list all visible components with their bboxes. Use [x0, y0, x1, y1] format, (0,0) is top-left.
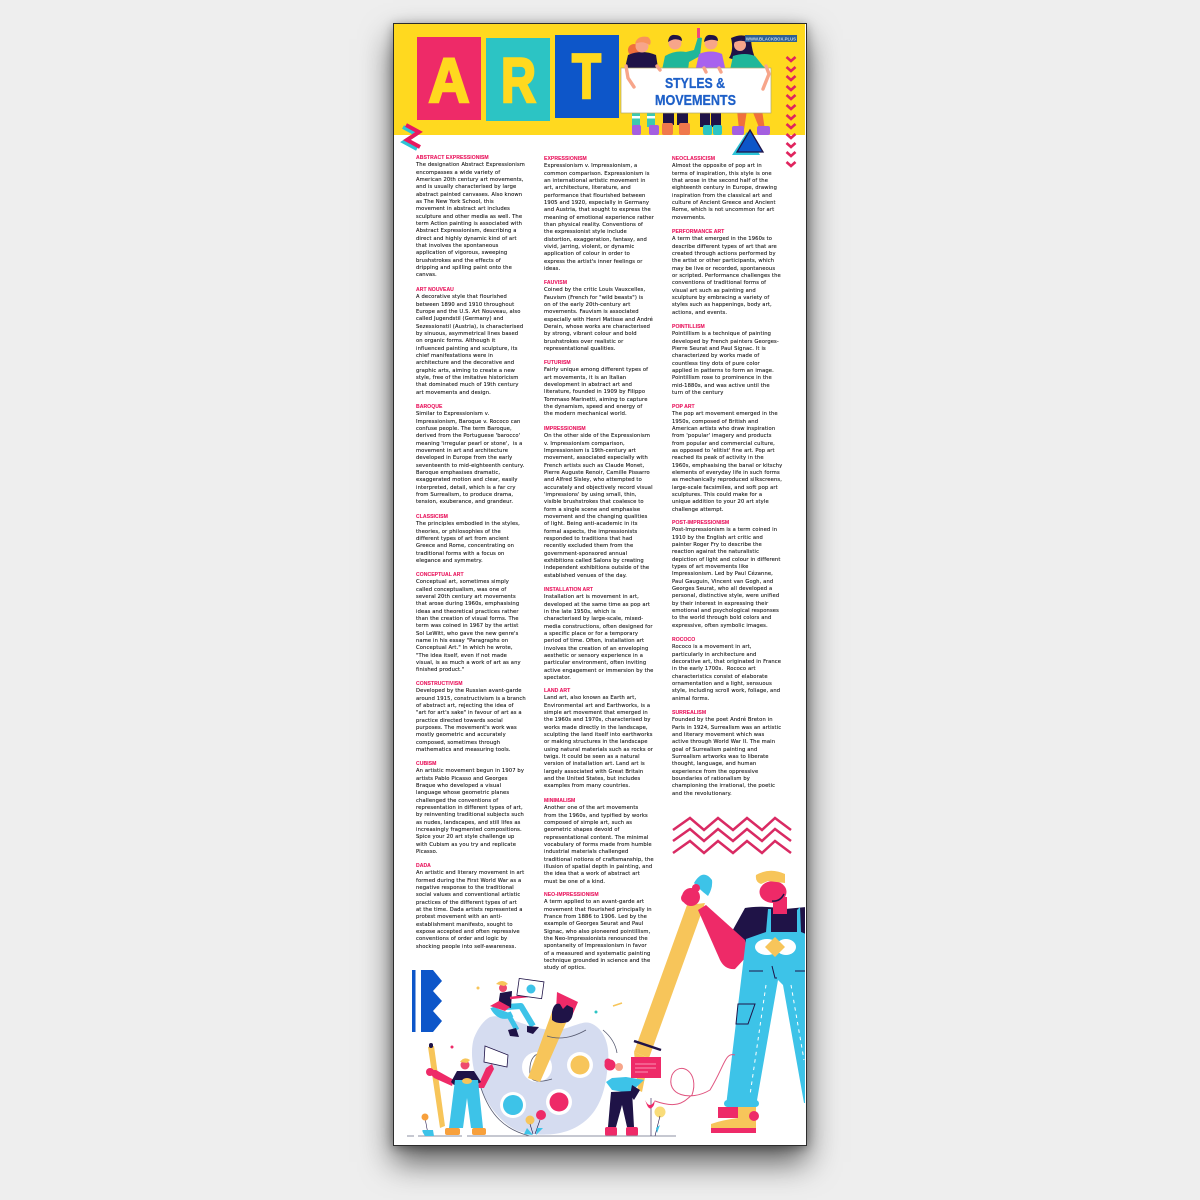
entry: minimalism: Another one of the art movements from the 1960s, and typified by works composed of simple art, such as geometric shapes devoid of representational content. The minimal vocabulary of forms made from humble industrial materials challenged traditional notions of craftsmanship, the illusion of spatial depth in painting, and the idea that a work of abstract art must be one of a kind. — [544, 805, 654, 885]
header band — [394, 24, 805, 135]
entry: expressionism: Expressionism v. Impressionism, a common comparison. Expressionism is an international artistic movement in art, architecture, literature, and performance that flourished between 1905 and 1920, especially in Germany and Austria, that sought to express the meaning of emotional experience rather than physical reality. Conventions of the expressionist style include distortion, exaggeration, fantasy, and vivid, jarring, violent, or dynamic application of colour in order to express the artist's inner feelings or ideas. — [544, 163, 654, 272]
big artist figure — [698, 871, 806, 1133]
person one holding banner — [625, 37, 659, 135]
giant pencil — [634, 875, 712, 1092]
triangle accent — [732, 130, 763, 155]
entry: land art: Land art, also known as Earth art, Environmental art and Earthworks, is a simple art movement that emerged in the 1960s and 1970s, characterised by works made directly in the landscape, sculpting the land itself into earthworks or making structures in the landscape using natural materials such as rocks or twigs. It could be seen as a natural version of installation art. Land art is largely associated with Great Britain and the United States, but includes examples from many countries. — [544, 695, 653, 789]
entry: expressionism: EXPRESSIONISM — [544, 156, 587, 162]
chevron column — [786, 57, 796, 166]
entry: dada: DADA — [416, 863, 431, 869]
entry: post-impressionism: POST-IMPRESSIONISM — [672, 520, 729, 526]
person four with long hair — [729, 35, 770, 135]
entry: constructivism: CONSTRUCTIVISM — [416, 681, 463, 687]
entry: conceptual art: CONCEPTUAL ART — [416, 572, 464, 578]
zigzag decoration — [673, 818, 791, 853]
entry: land art: LAND ART — [544, 688, 570, 694]
entry: performance art: PERFORMANCE ART — [672, 229, 724, 235]
entry: conceptual art: Conceptual art, sometimes simply called conceptualism, was one of several 20th century art movements that arose during 1960s, emphasising ideas and theoretical practices rather than the creation of visual forms. The term was coined in 1967 by the artist Sol LeWitt, who gave the new genre's name in his essay "Paragraphs on Conceptual Art." In which he wrote, "The idea itself, even if not made visual, is as much a work of art as any finished product." — [416, 579, 521, 673]
blue b shape — [412, 970, 442, 1032]
z squiggle accent — [403, 125, 420, 149]
entry: baroque: BAROQUE — [416, 404, 442, 410]
sitting person with frame — [490, 978, 544, 1037]
entry: constructivism: Developed by the Russian avant-garde around 1915, constructivism is a branch of abstract art, rejecting the idea of "art for art's sake" in favour of art as a practice directed towards social purposes. The movement's work was mostly geometric and accurately composed, sometimes through mathematics and measuring tools. — [416, 688, 526, 753]
letter tile A: A — [428, 46, 470, 116]
entry: futurism: FUTURISM — [544, 360, 571, 366]
banner: MOVEMENTS — [655, 92, 736, 109]
poster panel — [393, 23, 807, 1146]
letter tile R — [486, 38, 550, 121]
entry: surrealism: SURREALISM — [672, 710, 706, 716]
person three — [695, 35, 726, 135]
entry: neoclassicism: Almost the opposite of pop art in terms of inspiration, this style is one that arose in the second half of the eighteenth century in Europe, drawing inspiration from the classical art and culture of Ancient Greece and Ancient Rome, which is not uncommon for art movements. — [672, 163, 777, 221]
entry: baroque: Similar to Expressionism v. Impressionism, Baroque v. Rococo can confuse people. The term Baroque, derived from the Portuguese 'barocco' meaning 'irregular pearl or stone', is a movement in art and architecture developed in Europe from the early seventeenth to mid-eighteenth century. Baroque emphasises dramatic, exaggerated motion and clear, easily interpreted, detail, which is a far cry from Surrealism, to produce drama, tension, exuberance, and grandeur. — [416, 411, 524, 505]
entry: impressionism: IMPRESSIONISM — [544, 426, 586, 432]
flowers and ground — [407, 986, 676, 1136]
website tag — [745, 35, 797, 42]
entry: performance art: A term that emerged in the 1960s to describe different types of art that are created through actions performed by the artist or other participants, which may be live or recorded, spontaneous or scripted. Performance challenges the conventions of traditional forms of visual art such as painting and sculpture by embracing a variety of styles such as happenings, body art, actions, and events. — [672, 236, 781, 316]
letter tile A — [417, 37, 481, 120]
entry: installation art: Installation art is movement in art, developed at the same time as pop art in the late 1950s, which is characterised by large-scale, mixed- media constructions, often designed for a specific place or for a temporary period of time. Often, installation art involves the creation of an enveloping aesthetic or sensory experience in a particular environment, often inviting active engagement or immersion by the spectator. — [544, 594, 653, 681]
entry: classicism: The principles embodied in the styles, theories, or philosophies of the different types of art from ancient Greece and Rome, concentrating on traditional forms with a focus on elegance and symmetry. — [416, 521, 520, 564]
banner — [621, 68, 771, 113]
entry: neo-impressionism: NEO-IMPRESSIONISM — [544, 892, 599, 898]
entry: classicism: CLASSICISM — [416, 514, 448, 520]
entry: futurism: Fairly unique among different types of art movements, it is an Italian development in abstract art and literature, founded in 1909 by Filippo Tommaso Marinetti, aiming to capture the dynamism, speed and energy of the modern mechanical world. — [544, 367, 648, 417]
entry: surrealism: Founded by the poet André Breton in Paris in 1924, Surrealism was an artistic and literary movement which was active through World War II. The main goal of Surrealism painting and Surrealism artworks was to liberate thought, language, and human experience from the oppressive boundaries of rationalism by championing the irrational, the poetic and the revolutionary. — [672, 717, 781, 797]
entry: neoclassicism: NEOCLASSICISM — [672, 156, 715, 162]
entry: rococo: ROCOCO — [672, 637, 695, 643]
entry: art nouveau: A decorative style that flourished between 1890 and 1910 throughout Europe and the U.S. Art Nouveau, also called Jugendstil (Germany) and Sezessionstil (Austria), is characterised by sinuous, asymmetrical lines based on organic forms. Although it influenced painting and sculpture, its chief manifestations were in architecture and the decorative and graphic arts, aiming to create a new style, free of the imitative historicism that dominated much of 19th century art movements and design. — [416, 294, 523, 396]
letter tile R: R — [501, 46, 536, 116]
entry: abstract expressionism: The designation Abstract Expressionism encompasses a wide variety of American 20th century art movements, and is usually characterised by large abstract painted canvases. Also known as The New York School, this movement in abstract art includes sculpture and other media as well. The term Action painting is associated with Abstract Expressionism, describing a direct and highly dynamic kind of art that involves the spontaneous application of vigorous, sweeping brushstrokes and the effects of dripping and spilling paint onto the canvas. — [416, 162, 525, 278]
letter tile T — [555, 35, 619, 118]
entry: cubism: An artistic movement begun in 1907 by artists Pablo Picasso and Georges Braque who developed a visual language whose geometric planes challenged the conventions of representation in different types of art, by reinventing traditional subjects such as nudes, landscapes, and still lifes as increasingly fragmented compositions. Spice your 20 art style challenge up with Cubism as you try and replicate Picasso. — [416, 768, 524, 855]
entry: minimalism: MINIMALISM — [544, 798, 575, 804]
entry: fauvism: Coined by the critic Louis Vauxcelles, Fauvism (French for "wild beasts") is on of the early 20th-century art movements. Fauvism is associated especially with Henri Matisse and André Derain, whose works are characterised by strong, vibrant colour and bold brushstrokes over realistic or representational qualities. — [544, 287, 653, 352]
website tag: WWW.BLACKBOX.PLUS — [746, 36, 796, 41]
entry: abstract expressionism: ABSTRACT EXPRESSIONISM — [416, 155, 489, 161]
entry: impressionism: On the other side of the Expressionism v. Impressionism comparison, Impressionism is 19th-century art movement, associated especially with French artists such as Claude Monet, Pierre Auguste Renoir, Camille Pissarro and Alfred Sisley, who attempted to accurately and objectively record visual 'impressions' by using small, thin, visible brushstrokes that coalesce to form a single scene and emphasise movement and the changing qualities of light. Being anti-academic in its formal aspects, the impressionists responded to traditions that had recently excluded them from the government-sponsored annual exhibitions called Salons by creating independent exhibitions outside of the established venues of the day. — [544, 433, 653, 579]
entry: pop art: The pop art movement emerged in the 1950s, composed of British and American artists who draw inspiration from 'popular' imagery and products from popular and commercial culture, as opposed to 'elitist' fine art. Pop art reached its peak of activity in the 1960s, emphasising the banal or kitschy elements of everyday life in such forms as mechanically reproduced silkscreens, large-scale facsimiles, and soft pop art sculptures. This could make for a unique addition to your 20 art style challenge attempt. — [672, 411, 782, 513]
entry: post-impressionism: Post-Impressionism is a term coined in 1910 by the English art critic and painter Roger Fry to describe the reaction against the naturalistic depiction of light and colour in different types of art movements like Impressionism. Led by Paul Cézanne, Paul Gauguin, Vincent van Gogh, and Georges Seurat, who all developed a personal, distinctive style, were unified by their interest in expressing their emotional and psychological responses to the world through bold colors and expressive, often symbolic images. — [672, 527, 781, 629]
entry: installation art: INSTALLATION ART — [544, 587, 593, 593]
entry: pop art: POP ART — [672, 404, 695, 410]
banner: STYLES & — [665, 75, 725, 92]
person two with raised arm — [662, 28, 702, 135]
right person with sign — [604, 1057, 661, 1136]
paint brush — [528, 992, 586, 1082]
letter tile T: T — [572, 42, 601, 112]
entry: rococo: Rococo is a movement in art, particularly in architecture and decorative art, that originated in France in the early 1700s. Rococo art characteristics consist of elaborate ornamentation and a light, sensuous style, including scroll work, foliage, and animal forms. — [672, 644, 781, 702]
entry: art nouveau: ART NOUVEAU — [416, 287, 454, 293]
string curve — [655, 1055, 735, 1105]
left person with pencil — [426, 1043, 508, 1135]
entry: pointillism: Pointillism is a technique of painting developed by French painters Georges- Pierre Seurat and Paul Signac. It is characterized by works made of countless tiny dots of pure color applied in patterns to form an image. Pointillism rose to prominence in the mid-1880s, and was active until the turn of the century — [672, 331, 779, 396]
hands over banner — [626, 66, 769, 89]
palette — [472, 1016, 617, 1136]
entry: cubism: CUBISM — [416, 761, 436, 767]
illustrations and header artwork — [394, 24, 805, 1136]
entry: dada: An artistic and literary movement in art formed during the First World War as a negative response to the traditional social values and conventional artistic practices of the different types of art at the time. Dada artists represented a protest movement with an anti- establishment manifesto, sought to expose accepted and often repressive conventions of order and logic by shocking people into self-awareness. — [416, 870, 524, 950]
entry: fauvism: FAUVISM — [544, 280, 567, 286]
entry: pointillism: POINTILLISM — [672, 324, 705, 330]
entry: neo-impressionism: A term applied to an avant-garde art movement that flourished principally in France from 1886 to 1906. Led by the example of Georges Seurat and Paul Signac, who also pioneered pointillism, the Neo-Impressionists renounced the spontaneity of Impressionism in favor of a measured and systematic painting technique grounded in science and the study of optics. — [544, 899, 652, 971]
